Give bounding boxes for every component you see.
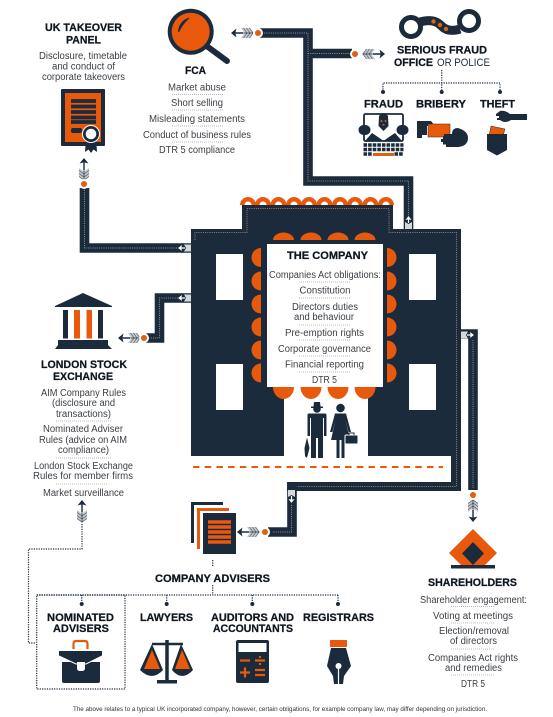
panel text: UK Takeover Panel: and conduct of: [52, 62, 115, 72]
panel text: London Stock Exchange: LONDON STOCK: [41, 359, 127, 371]
panel text: the company: DTR 5: [312, 375, 337, 386]
heading: nominated advisers: ADVISERS: [53, 623, 109, 635]
route: FCA and fraud connector: [260, 33, 408, 229]
panel text: shareholders: DTR 5: [461, 679, 485, 690]
roof scallops: [240, 197, 394, 205]
icon: business people: [304, 402, 358, 458]
panel text: FCA: Conduct of business rules: [143, 130, 251, 141]
route: shareholders connector: [461, 334, 473, 490]
route: UK Takeover Panel connector: [84, 188, 191, 248]
icon: documents: [192, 504, 236, 554]
arrow: to FCA: [231, 28, 263, 38]
panel text: FCA: Misleading statements: [149, 114, 245, 125]
icon: fraud at computer: [358, 113, 408, 156]
dashed pavement line: [193, 466, 443, 468]
nominated advisers dotted box: [37, 595, 125, 689]
heading: auditors and accountants: AUDITORS AND: [211, 612, 294, 624]
panel text: shareholders: Election/removal: [439, 626, 509, 637]
panel text: London Stock Exchange: Nominated Adviser: [43, 424, 124, 435]
panel text: UK Takeover Panel: [39, 22, 127, 83]
windows: [216, 254, 436, 410]
panel text: FCA: Short selling: [171, 98, 223, 109]
panel text: London Stock Exchange: London Stock Exchange: [34, 461, 133, 472]
panel text: UK Takeover Panel: PANEL: [66, 35, 101, 47]
panel text: shareholders: SHAREHOLDERS: [428, 577, 517, 589]
arrow: to Serious Fraud Office: [350, 49, 385, 59]
panel heading: Serious Fraud Office or police: OR POLICE: [437, 57, 490, 69]
panel text: UK Takeover Panel: Disclosure, timetable: [39, 51, 127, 62]
panel text: shareholders: of directors: [450, 636, 497, 647]
panel text: the company: Constitution: [300, 286, 350, 297]
route: company advisers connector: [268, 486, 292, 532]
panel text: UK Takeover Panel: corporate takeovers: [42, 72, 125, 83]
orange scallops around panel: [252, 232, 396, 399]
connector tree: company advisers: [37, 560, 340, 606]
route: London Stock Exchange connector: [146, 298, 191, 338]
building: the company: [191, 197, 461, 528]
heading: company advisers: COMPANY ADVISERS: [155, 573, 270, 585]
panel text: FCA: Market abuse: [168, 82, 226, 94]
panel text: FCA: DTR 5 compliance: [159, 145, 235, 156]
arrow: to London Stock Exchange: [118, 333, 149, 343]
arrow: to shareholders: [468, 490, 478, 522]
man with umbrella: [304, 402, 326, 458]
panel text: the company: Companies Act obligations:: [269, 270, 381, 281]
icon: bribery hands: [417, 121, 468, 147]
panel heading: Serious Fraud Office or police: SERIOUS FRAUD: [397, 44, 487, 56]
panel text: shareholders: and remedies: [445, 663, 502, 674]
icon: shareholders diamond: [449, 529, 497, 568]
heading: lawyers: LAWYERS: [140, 612, 193, 624]
icon: fountain pen nib: [327, 640, 351, 684]
panel text: the company: Pre-emption rights: [285, 328, 364, 339]
panel text: UK Takeover Panel: UK TAKEOVER: [45, 22, 122, 34]
icon: stock exchange building: [55, 293, 112, 349]
panel text: London Stock Exchange: Market surveillance: [43, 488, 124, 499]
icon: theft hand and pocket: [487, 111, 527, 156]
white arrows on routes: [178, 216, 474, 503]
panel text: the company: [269, 250, 381, 386]
panel text: London Stock Exchange: Rules (advice on AIM: [39, 435, 127, 446]
heading: fraud: FRAUD: [364, 98, 403, 110]
panel text: shareholders: [420, 577, 527, 690]
panel text: shareholders: Voting at meetings: [433, 611, 513, 622]
woman with briefcase: [330, 404, 358, 458]
panel text: the company: THE COMPANY: [287, 250, 369, 262]
panel text: FCA: [143, 65, 251, 156]
panel text: London Stock Exchange: Rules for member firms: [33, 471, 133, 482]
icon: scales of justice: [140, 640, 193, 684]
panel text: the company: Corporate governance: [278, 344, 371, 355]
arrow: to UK Takeover Panel: [79, 158, 89, 189]
icon: magnifying glass: [168, 9, 227, 61]
heading: registrars: REGISTRARS: [303, 612, 374, 624]
panel heading: Serious Fraud Office or police: OFFICE: [394, 57, 433, 69]
panel text: London Stock Exchange: AIM Company Rules: [41, 388, 126, 399]
icon: certificate: [61, 89, 105, 153]
panel text: London Stock Exchange: EXCHANGE: [53, 371, 113, 383]
heading: auditors and accountants: [211, 612, 294, 635]
arrow: to company advisers: [237, 527, 270, 537]
panel text: shareholders: Companies Act rights: [428, 653, 518, 664]
panel text: the company: Directors duties: [292, 302, 358, 313]
arrow: market surveillance link to nominated advisers: [28, 500, 87, 643]
connector tree: fraud categories: [381, 70, 502, 94]
panel text: the company: and behaviour: [294, 312, 355, 323]
panel text: shareholders: Shareholder engagement:: [420, 595, 527, 606]
heading: auditors and accountants: ACCOUNTANTS: [213, 623, 293, 635]
footnote: The above relates to a typical UK incorporated company, however, certain obligations, for example company law, may differ depending on jurisdiction.: [73, 706, 487, 713]
heading: nominated advisers: [47, 612, 114, 635]
heading: bribery: BRIBERY: [416, 98, 467, 110]
icon: handcuffs: [402, 12, 478, 36]
heading: theft: THEFT: [480, 98, 515, 110]
panel heading: Serious Fraud Office or police: [394, 44, 490, 69]
panel text: London Stock Exchange: transactions): [56, 409, 111, 420]
icon: briefcase: [59, 641, 102, 683]
panel text: FCA: FCA: [185, 65, 206, 77]
panel text: London Stock Exchange: (disclosure and: [52, 398, 115, 409]
heading: nominated advisers: NOMINATED: [47, 612, 114, 624]
panel text: London Stock Exchange: [33, 359, 133, 499]
panel text: London Stock Exchange: compliance): [58, 445, 109, 456]
icon: calculator: [236, 640, 269, 683]
panel text: the company: Financial reporting: [285, 360, 364, 371]
